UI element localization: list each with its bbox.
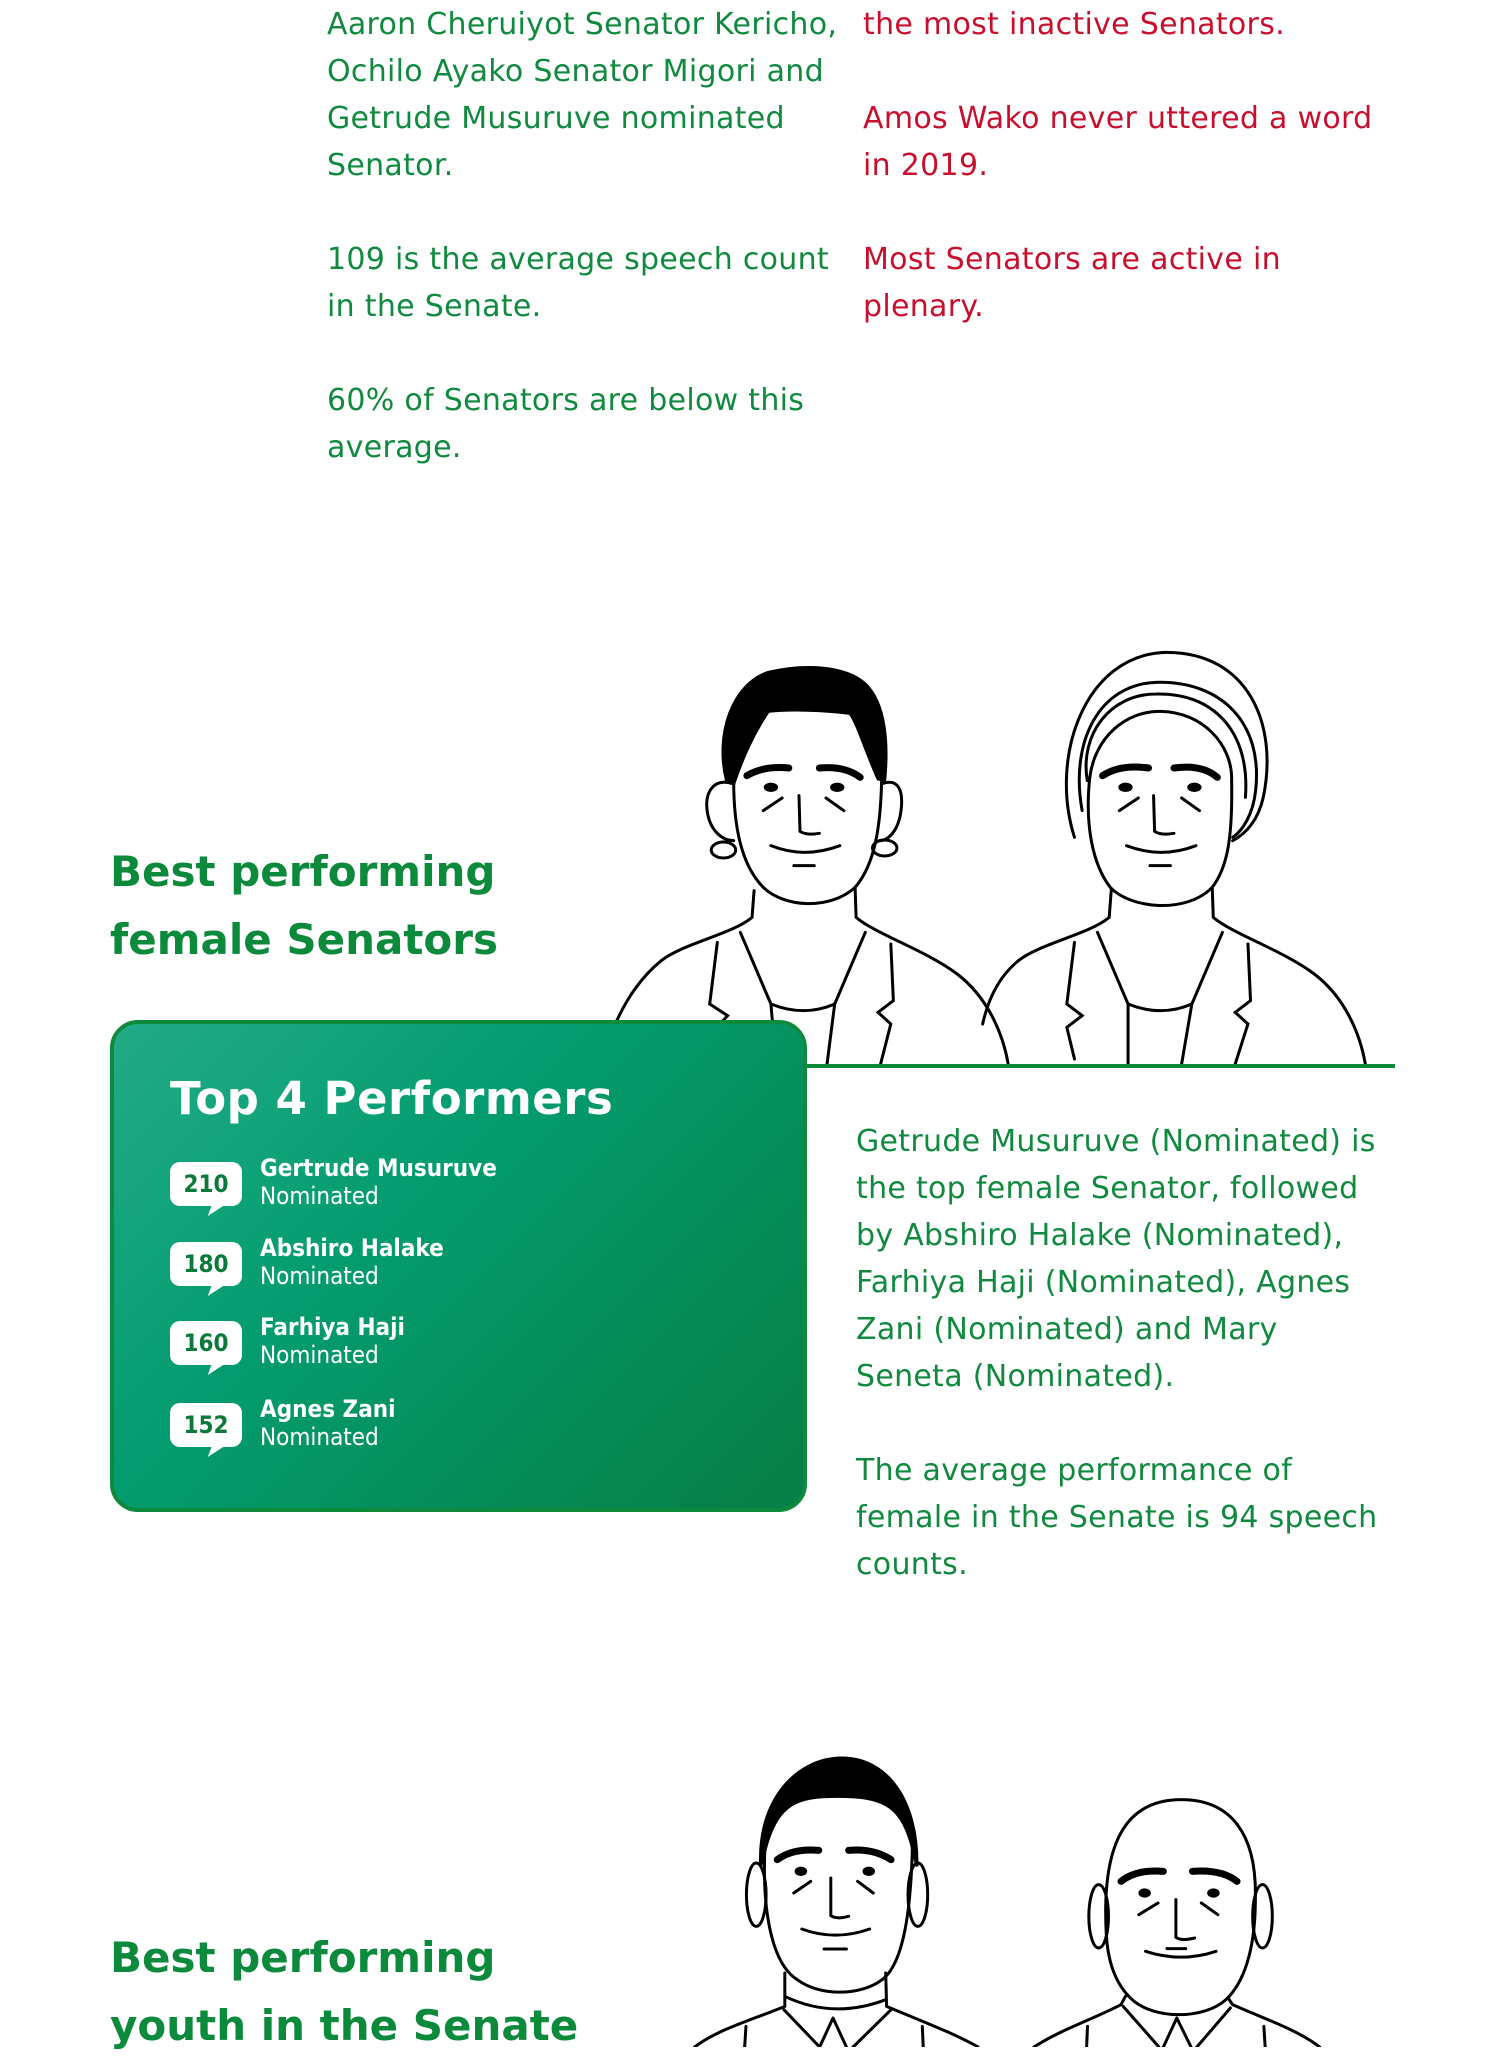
performer 4 <box>170 1395 396 1457</box>
panel: top 4 performers: Gertrude Musuruve <box>260 1154 497 1182</box>
text block: right column facts: the most inactive Senators. <box>863 7 1285 42</box>
panel: top 4 performers: Nominated <box>260 1341 379 1369</box>
text block: left column facts: Aaron Cheruiyot Senator Kericho, <box>327 7 837 42</box>
text block: female senators summary: Seneta (Nominated). <box>856 1359 1174 1394</box>
text block: female senators summary: counts. <box>856 1547 968 1582</box>
text block: right column facts: plenary. <box>863 289 984 324</box>
text block: left column facts <box>327 7 837 465</box>
panel: top 4 performers: Nominated <box>260 1182 379 1210</box>
panel: top 4 performers: Abshiro Halake <box>260 1234 444 1262</box>
text block: right column facts: Amos Wako never uttered a word <box>863 101 1373 136</box>
panel: top 4 performers: 152 <box>183 1411 229 1439</box>
text block: female senators summary: the top female Senator, followed <box>856 1171 1358 1206</box>
text block: left column facts: Senator. <box>327 148 454 183</box>
text block: right column facts <box>863 7 1373 324</box>
panel: top 4 performers: Nominated <box>260 1423 379 1451</box>
panel: top 4 performers: Agnes Zani <box>260 1395 396 1423</box>
text block: female senators summary: Zani (Nominated) and Mary <box>856 1312 1278 1347</box>
text block: female senators summary: female in the Senate is 94 speech <box>856 1500 1377 1535</box>
heading: best performing female senators: Best performing <box>110 847 495 896</box>
panel: top 4 performers: Nominated <box>260 1262 379 1290</box>
illustration: two male youth senators <box>693 1756 1322 2047</box>
divider line under female illustration <box>805 1064 1395 1068</box>
illustration: two female senators <box>616 650 1367 1064</box>
text block: right column facts: in 2019. <box>863 148 988 183</box>
text block: right column facts: Most Senators are active in <box>863 242 1281 277</box>
text block: left column facts: average. <box>327 430 462 465</box>
panel: top 4 performers: 160 <box>183 1329 229 1357</box>
heading: best performing youth: Best performing <box>110 1933 495 1982</box>
text block: female senators summary: by Abshiro Halake (Nominated), <box>856 1218 1343 1253</box>
text block: left column facts: 109 is the average speech count <box>327 242 829 277</box>
panel: top 4 performers: Farhiya Haji <box>260 1313 405 1341</box>
text block: female senators summary: The average performance of <box>856 1453 1292 1488</box>
panel: top 4 performers <box>110 1020 807 1512</box>
heading: best performing youth: youth in the Senate <box>110 2001 578 2050</box>
heading: best performing youth <box>110 1933 578 2050</box>
text block: left column facts: Getrude Musuruve nominated <box>327 101 785 136</box>
text block: female senators summary: Getrude Musuruve (Nominated) is <box>856 1124 1376 1159</box>
text block: female senators summary <box>856 1124 1377 1582</box>
heading: best performing female senators <box>110 847 498 964</box>
text block: female senators summary: Farhiya Haji (Nominated), Agnes <box>856 1265 1350 1300</box>
panel: top 4 performers: 210 <box>183 1170 229 1198</box>
text block: left column facts: in the Senate. <box>327 289 542 324</box>
panel title: Top 4 Performers <box>170 1072 613 1125</box>
performer 1 <box>170 1154 497 1216</box>
performer 2 <box>170 1234 444 1296</box>
heading: best performing female senators: female Senators <box>110 915 498 964</box>
text block: left column facts: 60% of Senators are below this <box>327 383 804 418</box>
performer 3 <box>170 1313 405 1375</box>
text block: left column facts: Ochilo Ayako Senator Migori and <box>327 54 824 89</box>
panel: top 4 performers: 180 <box>183 1250 229 1278</box>
